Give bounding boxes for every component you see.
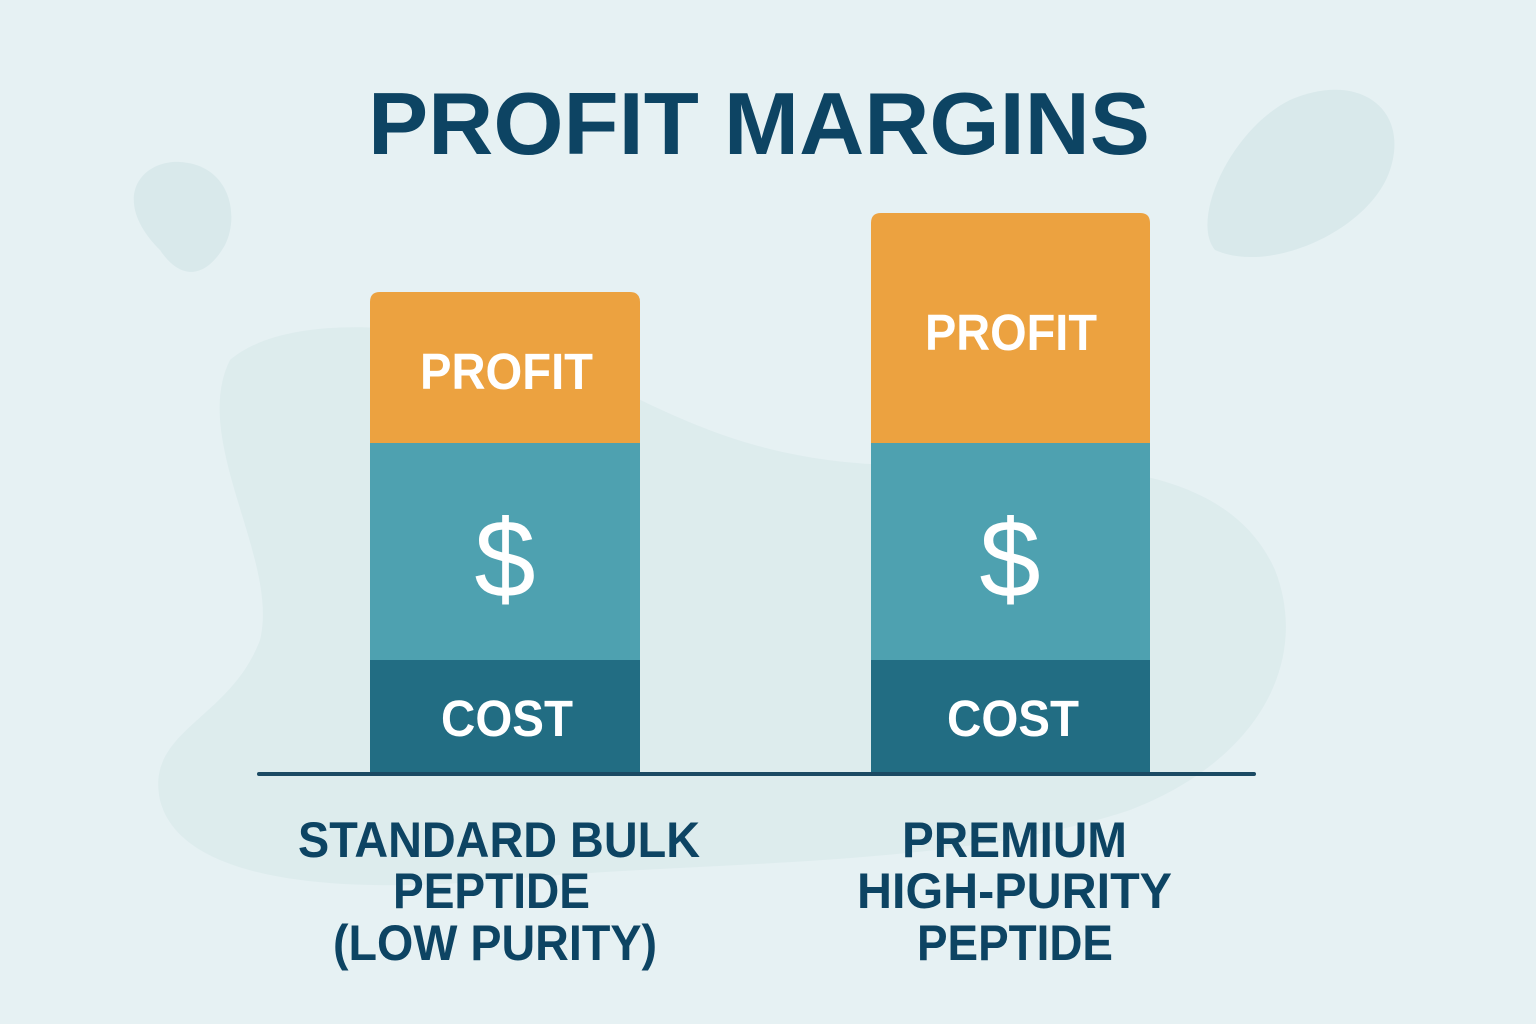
- bar: standard bulk peptide: [370, 292, 640, 773]
- bar: standard bulk peptide: COST: [441, 690, 573, 747]
- bar: standard bulk peptide: PROFIT: [420, 343, 593, 400]
- bar: premium high-purity peptide: PROFIT: [925, 304, 1097, 361]
- label: premium high-purity peptide: HIGH-PURITY: [857, 863, 1172, 919]
- bar: standard bulk peptide: $: [474, 498, 536, 621]
- label: premium high-purity peptide: PEPTIDE: [917, 915, 1113, 971]
- label: standard bulk peptide: STANDARD BULK: [298, 812, 700, 868]
- label: premium high-purity peptide: [857, 812, 1172, 971]
- label: standard bulk peptide: [298, 812, 700, 971]
- bar: premium high-purity peptide: $: [979, 498, 1041, 621]
- title: PROFIT MARGINS: [368, 74, 1150, 173]
- label: standard bulk peptide: PEPTIDE: [393, 863, 590, 919]
- baseline axis: [257, 772, 1256, 776]
- label: premium high-purity peptide: PREMIUM: [902, 812, 1127, 868]
- label: standard bulk peptide: (LOW PURITY): [333, 915, 657, 971]
- bar: premium high-purity peptide: COST: [947, 690, 1079, 747]
- bar: premium high-purity peptide: [871, 213, 1150, 773]
